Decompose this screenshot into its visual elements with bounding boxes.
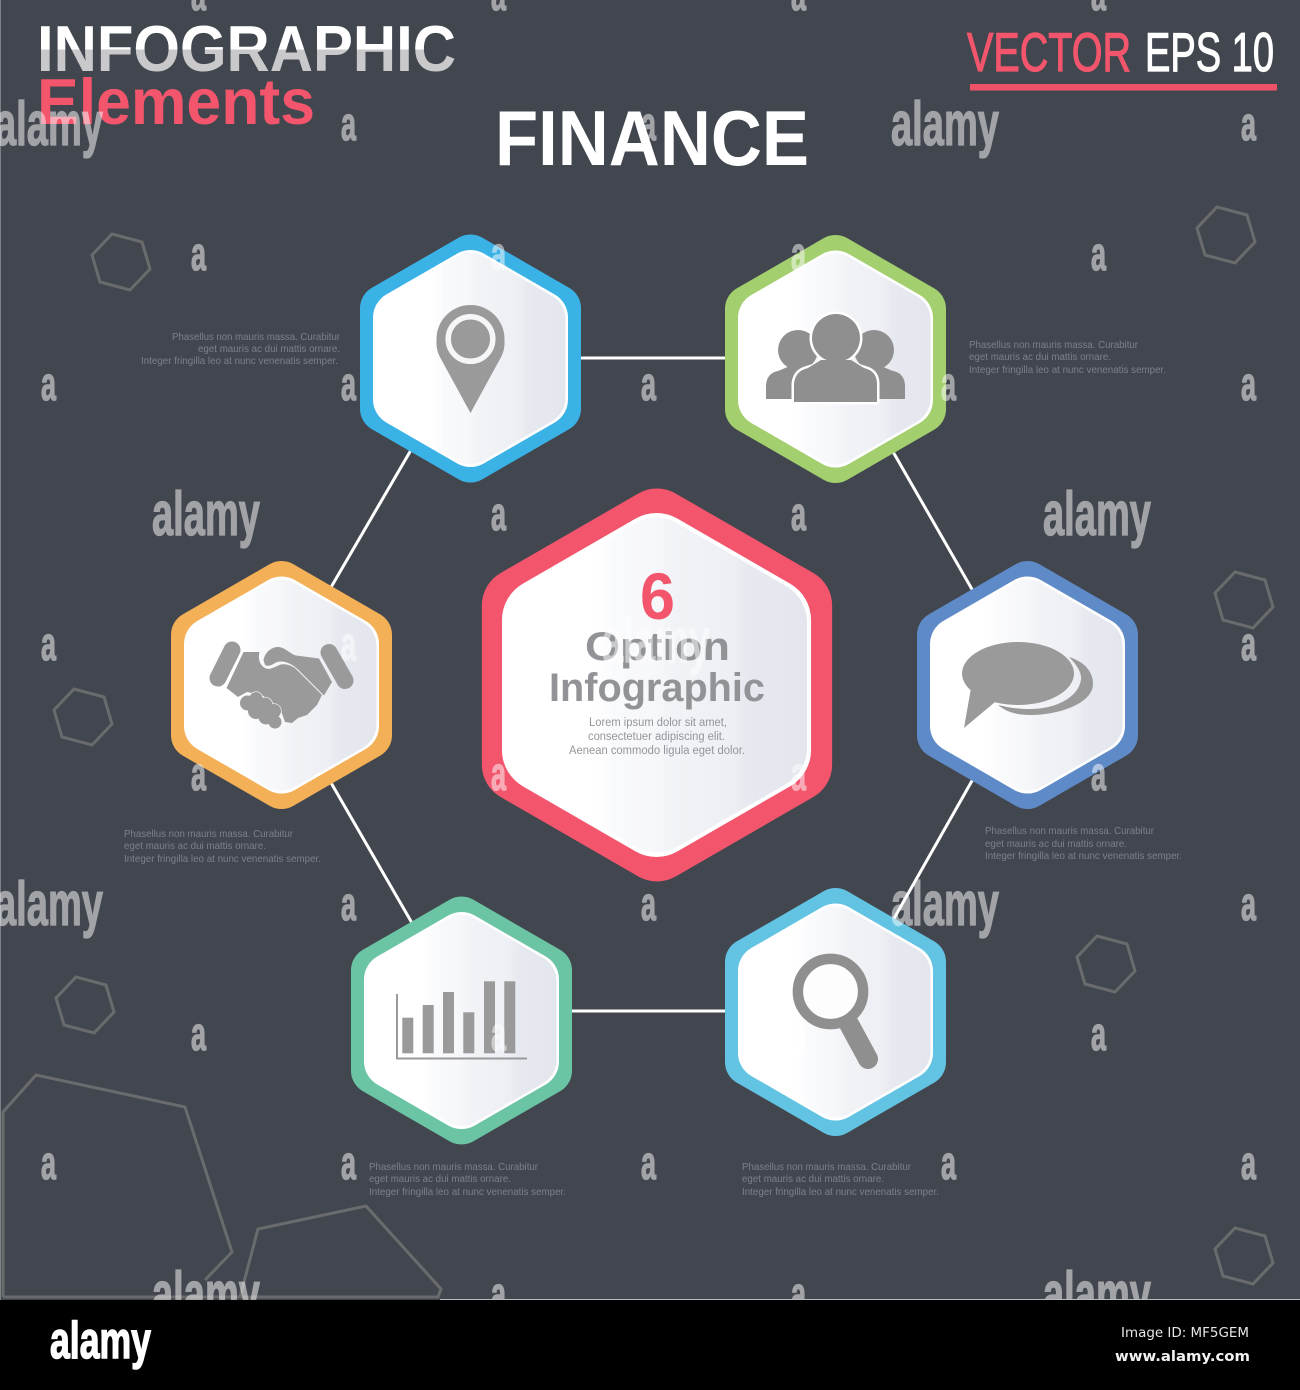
panel: chat hexagon — [940, 584, 1114, 786]
watermark layer: a — [341, 1136, 356, 1189]
image id: Image ID: MF5GEM — [1121, 1325, 1249, 1341]
watermark layer: a — [641, 97, 656, 150]
panel: team hexagon — [748, 258, 922, 460]
icon: handshake — [218, 647, 345, 728]
watermark layer: a — [1091, 227, 1106, 280]
text block: search: Integer fringilla leo at nunc venenatis semper. — [742, 1186, 939, 1198]
watermark layer: a — [791, 1267, 806, 1320]
watermark layer: a — [341, 97, 356, 150]
connector lines between hexagons — [330, 358, 973, 1011]
text block: team — [969, 339, 1166, 376]
heading: Option Infographic: Infographic — [549, 666, 765, 710]
text block: location — [141, 331, 340, 367]
watermark layer: a — [941, 617, 956, 670]
watermark layer: alamy — [0, 870, 103, 939]
watermark layer: a — [491, 227, 506, 280]
watermark layer: a — [791, 487, 806, 540]
text block: handshake: eget mauris ac dui mattis ornare. — [124, 840, 266, 852]
watermark layer: a — [941, 1136, 956, 1189]
watermark layer: alamy — [891, 90, 999, 159]
central description: Aenean commodo ligula eget dolor. — [569, 745, 745, 757]
text block: chat: Phasellus non mauris massa. Curabitur — [985, 825, 1154, 837]
watermark layer: a — [1091, 1007, 1106, 1060]
icon: magnifying glass — [798, 959, 868, 1059]
watermark layer: a — [791, 747, 806, 800]
watermark layer: a — [1241, 617, 1256, 670]
text block: chart — [369, 1161, 566, 1198]
text block: location: Integer fringilla leo at nunc venenatis semper. — [141, 355, 338, 367]
watermark layer: a — [641, 877, 656, 930]
icon: group of people — [766, 314, 905, 402]
watermark layer: a — [791, 227, 806, 280]
text block: team: Integer fringilla leo at nunc venenatis semper. — [969, 364, 1166, 376]
watermark layer: a — [41, 1136, 56, 1189]
watermark layer: a — [1091, 747, 1106, 800]
watermark layer: a — [1241, 1136, 1256, 1189]
text block: chat: eget mauris ac dui mattis ornare. — [985, 838, 1127, 850]
text block: search — [742, 1161, 939, 1198]
heading: Finance: FINANCE — [495, 94, 809, 182]
website: www.alamy.com — [1115, 1349, 1250, 1365]
watermark layer: a — [641, 1136, 656, 1189]
title: Infographic Elements: Elements — [37, 65, 315, 138]
watermark layer: a — [191, 1007, 206, 1060]
footer bar — [0, 1299, 1300, 1390]
watermark layer: alamy — [891, 870, 999, 939]
watermark layer: alamy — [0, 90, 103, 159]
text block: handshake — [124, 828, 321, 865]
icon: map pin — [436, 305, 505, 413]
text block: chart: Phasellus non mauris massa. Curabitur — [369, 1161, 538, 1173]
text block: search: Phasellus non mauris massa. Curabitur — [742, 1161, 911, 1173]
watermark layer: a — [191, 747, 206, 800]
heading: Option Infographic — [549, 625, 765, 710]
watermark layer: a — [641, 357, 656, 410]
icon: bar chart — [396, 981, 527, 1060]
text block: team: eget mauris ac dui mattis ornare. — [969, 351, 1111, 363]
panel: chart hexagon — [374, 920, 548, 1121]
watermark layer: a — [341, 357, 356, 410]
watermark layer: alamy — [152, 1260, 260, 1329]
badge: Vector EPS 10: VECTOR — [967, 21, 1131, 83]
text block: handshake: Integer fringilla leo at nunc venenatis semper. — [124, 853, 321, 865]
watermark layer: a — [1241, 357, 1256, 410]
panel: location hexagon — [384, 258, 558, 459]
watermark layer: a — [1241, 877, 1256, 930]
watermark layer: a — [491, 747, 506, 800]
watermark layer: a — [41, 617, 56, 670]
text block: handshake: Phasellus non mauris massa. Curabitur — [124, 828, 293, 840]
title: Infographic Elements: INFOGRAPHIC — [37, 12, 456, 85]
title: Infographic Elements — [37, 12, 456, 138]
watermark layer: a — [41, 357, 56, 410]
watermark layer: a — [341, 877, 356, 930]
footer logo: alamy — [50, 1312, 151, 1370]
watermark layer: a — [1241, 97, 1256, 150]
panel: search hexagon — [748, 912, 922, 1112]
text block: location: eget mauris ac dui mattis ornare. — [198, 343, 340, 355]
text block: chart: eget mauris ac dui mattis ornare. — [369, 1173, 511, 1185]
badge: Vector EPS 10 — [967, 21, 1277, 90]
watermark layer: alamy — [602, 607, 710, 676]
icon: speech bubble — [962, 642, 1093, 728]
heading: Option Infographic: Option — [585, 625, 730, 669]
central description: Lorem ipsum dolor sit amet, — [589, 717, 727, 729]
number 6: 6 — [640, 559, 675, 633]
watermark layer: a — [791, 1007, 806, 1060]
panel: central hexagon — [519, 526, 795, 844]
text block: location: Phasellus non mauris massa. Curabitur — [172, 331, 340, 343]
watermark layer: a — [491, 487, 506, 540]
watermark layer: alamy — [152, 480, 260, 549]
text block: chart: Integer fringilla leo at nunc venenatis semper. — [369, 1186, 566, 1198]
watermark layer: a — [191, 227, 206, 280]
central description — [569, 717, 745, 757]
watermark layer: a — [341, 617, 356, 670]
text block: chat — [985, 825, 1182, 862]
watermark layer: alamy — [1043, 1260, 1151, 1329]
watermark layer: a — [491, 1267, 506, 1320]
central description: consectetuer adipiscing elit. — [588, 731, 725, 743]
text block: chat: Integer fringilla leo at nunc venenatis semper. — [985, 850, 1182, 862]
text block: team: Phasellus non mauris massa. Curabitur — [969, 339, 1138, 351]
watermark layer: alamy — [1043, 480, 1151, 549]
watermark layer: a — [941, 357, 956, 410]
panel: handshake hexagon — [194, 584, 368, 786]
watermark layer: a — [491, 1007, 506, 1060]
text block: search: eget mauris ac dui mattis ornare. — [742, 1173, 884, 1185]
